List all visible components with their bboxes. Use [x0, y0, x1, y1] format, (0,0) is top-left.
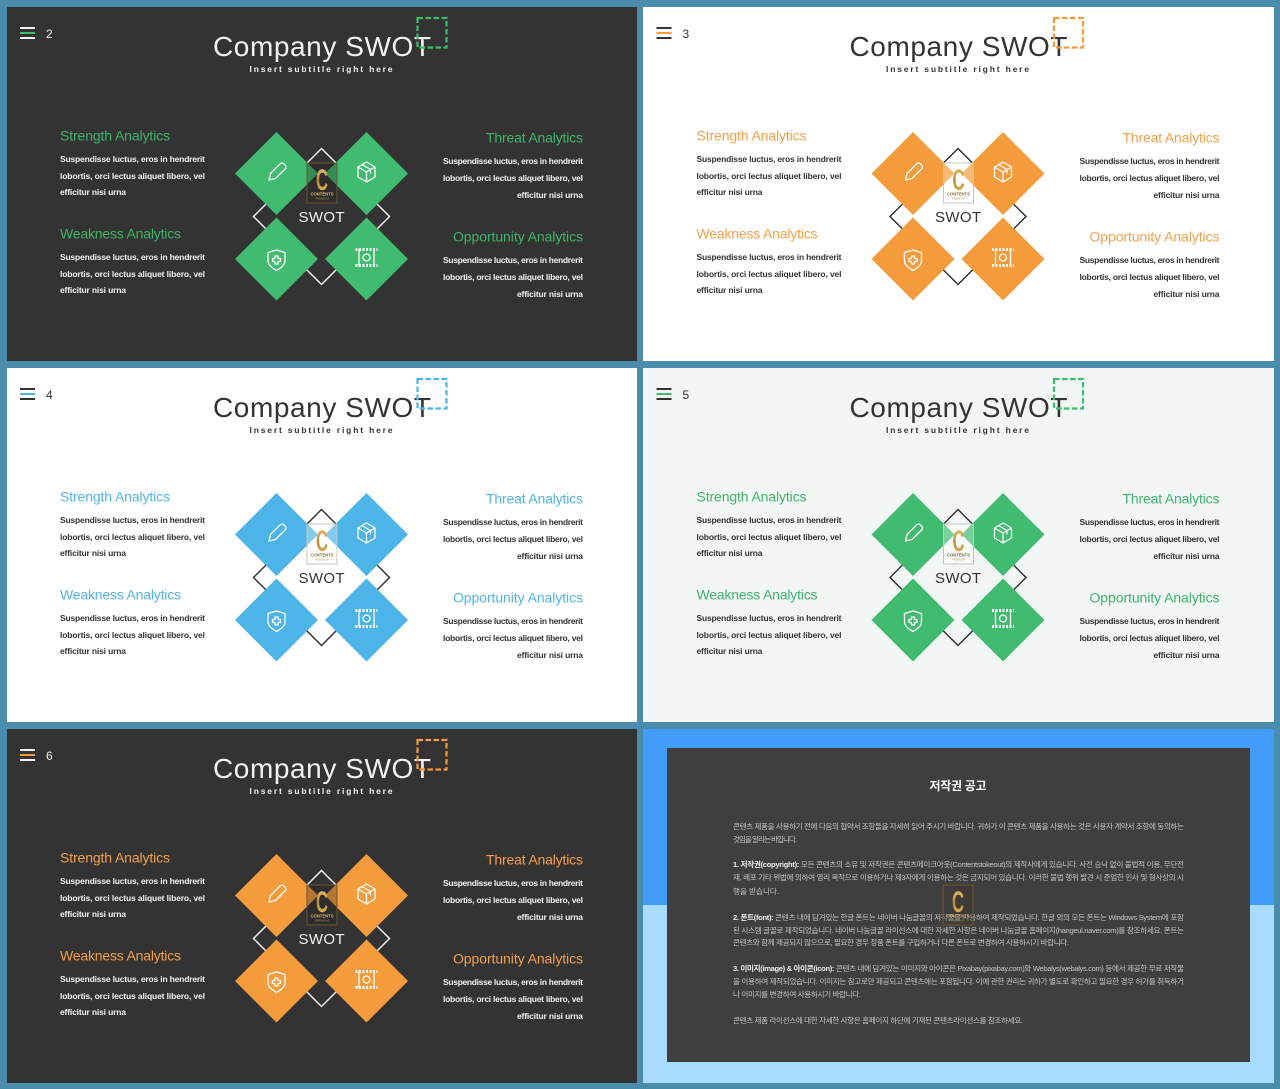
- icon: shield: [268, 250, 285, 270]
- weakness text block: lobortis, orci lectus aliquet libero, vel: [60, 991, 205, 1001]
- copyright paragraph: 재, 배포 기타 위법에 의하여 영리 목적으로 이용하거나 제3자에게 이용하는 것은 금지되어 있습니다. 이러한 불법 행위 발견 시 준엄한 민사 및 형사상의 시: [733, 872, 1184, 882]
- panel: slide 5 pale green: [643, 368, 1274, 722]
- icon: shield: [268, 611, 285, 632]
- logo: CONTENTS: [946, 914, 970, 918]
- strength text block: Strength Analytics: [60, 850, 170, 866]
- logo: PREMIUM: [952, 196, 966, 200]
- strength text block: Strength Analytics: [696, 488, 806, 504]
- page number: 6: [46, 749, 53, 763]
- opportunity text block: efficitur nisi urna: [1154, 289, 1220, 299]
- opportunity text block: efficitur nisi urna: [517, 289, 583, 299]
- diamond: opportunity: [962, 218, 1044, 300]
- image and icon paragraph: 3. 이미지(image) & 아이콘(icon): 콘텐츠 내에 담겨있는 이미지와 아이콘은 Pixabay(pixabay.com)와 Webalys(webalys.com) 등에서 제공한 무료 저작물: [733, 963, 1184, 973]
- threat text block: lobortis, orci lectus aliquet libero, vel: [1080, 173, 1220, 183]
- diamond: strength: [235, 493, 318, 576]
- swot label: SWOT: [935, 570, 981, 587]
- title dashed accent box: [1054, 379, 1083, 408]
- threat text block: [1080, 490, 1220, 561]
- opportunity text block: Suspendisse luctus, eros in hendrerit: [1080, 616, 1220, 626]
- swot diagram: [235, 493, 408, 662]
- swot label: SWOT: [298, 570, 344, 587]
- title: Company SWOT: [213, 753, 431, 784]
- logo: CONTENTS: [310, 552, 334, 558]
- strength text block: efficitur nisi urna: [60, 548, 126, 558]
- font paragraph: 콘텐츠와 함께 제공되지 않으므로, 필요한 경우 정품 폰트를 구입하거나 다른 폰트로 변경하여 사용하시기 바랍니다.: [733, 937, 1069, 947]
- opportunity text block: Suspendisse luctus, eros in hendrerit: [443, 616, 583, 626]
- strength text block: efficitur nisi urna: [696, 548, 763, 558]
- title dashed accent box: [418, 18, 446, 48]
- image and icon paragraph: 나 이미지를 변경하여 사용하시기 바랍니다.: [733, 989, 861, 999]
- icon: film: [356, 972, 378, 988]
- weakness text block: Suspendisse luctus, eros in hendrerit: [696, 252, 842, 262]
- logo: CONTENTS: [947, 552, 970, 558]
- logo: PREMIUM: [315, 918, 329, 922]
- title: Company SWOT: [850, 31, 1068, 62]
- logo: C: [316, 886, 328, 919]
- weakness text block: Weakness Analytics: [696, 226, 818, 242]
- threat text block: efficitur nisi urna: [1154, 551, 1220, 561]
- threat text block: [443, 490, 583, 561]
- weakness text block: lobortis, orci lectus aliquet libero, vel: [696, 630, 842, 640]
- menu icon: [20, 389, 35, 399]
- diamond: weakness: [235, 578, 318, 662]
- logo: CONTENTS: [310, 914, 334, 918]
- subtitle: Insert subtitle right here: [250, 64, 393, 74]
- logo: C: [952, 164, 964, 197]
- logo: [307, 885, 337, 925]
- intro paragraph: [733, 821, 1184, 844]
- swot label: SWOT: [298, 209, 344, 226]
- threat text block: lobortis, orci lectus aliquet libero, vel: [443, 173, 583, 183]
- strength text block: lobortis, orci lectus aliquet libero, vel: [696, 532, 842, 542]
- icon: box: [358, 884, 375, 904]
- font paragraph: 2. 폰트(font): 콘텐츠 내에 담겨있는 한글 폰트는 네이버 나눔글꼴의 저작물을 사용하여 제작되었습니다. 한글 외의 모든 폰트는 Windows System에 포함: [733, 912, 1184, 922]
- strength text block: lobortis, orci lectus aliquet libero, vel: [60, 171, 205, 181]
- logo: C: [316, 525, 328, 558]
- diamond: threat: [962, 493, 1044, 576]
- threat text block: efficitur nisi urna: [517, 912, 583, 922]
- weakness text block: lobortis, orci lectus aliquet libero, vel: [696, 269, 842, 279]
- image and icon paragraph: [733, 963, 1184, 999]
- opportunity text block: lobortis, orci lectus aliquet libero, vel: [443, 633, 583, 643]
- notice heading: 저작권 공고: [930, 778, 986, 793]
- menu icon: [20, 750, 35, 760]
- opportunity text block: efficitur nisi urna: [517, 650, 583, 660]
- icon: box: [358, 523, 375, 543]
- panel: slide 6 dark orange: [7, 729, 637, 1083]
- threat text block: Suspendisse luctus, eros in hendrerit: [1080, 156, 1220, 166]
- panel: slide 4 white blue: [7, 368, 637, 722]
- opportunity text block: lobortis, orci lectus aliquet libero, vel: [443, 994, 583, 1004]
- opportunity text block: Opportunity Analytics: [453, 228, 583, 244]
- diamond: strength: [235, 854, 318, 937]
- diamond: strength: [872, 132, 954, 215]
- threat text block: [443, 130, 583, 200]
- icon: film: [356, 250, 378, 266]
- subtitle: Insert subtitle right here: [886, 64, 1029, 74]
- swot diagram: [872, 493, 1044, 662]
- threat text block: [443, 852, 583, 922]
- opportunity text block: Opportunity Analytics: [453, 590, 583, 606]
- diamond: opportunity: [325, 218, 408, 300]
- page number: 4: [46, 388, 53, 402]
- diamond: weakness: [872, 578, 954, 662]
- title dashed accent box: [418, 740, 446, 770]
- weakness text block: lobortis, orci lectus aliquet libero, vel: [60, 269, 205, 279]
- logo: [943, 885, 973, 925]
- threat text block: Suspendisse luctus, eros in hendrerit: [1080, 517, 1220, 527]
- threat text block: efficitur nisi urna: [517, 551, 583, 561]
- diamond: strength: [872, 493, 954, 576]
- font paragraph: 된 시스템 글꼴로 제작되었습니다. 네이버 나눔글꼴 라이선스에 대한 자세한 사항은 네이버 나눔글꼴 홈페이지(hangeul.naver.com)를 참조하세요. 폰트는: [733, 925, 1184, 935]
- weakness text block: [696, 586, 842, 656]
- logo: [307, 524, 337, 564]
- diamond: weakness: [872, 218, 954, 300]
- opportunity text block: lobortis, orci lectus aliquet libero, vel: [1080, 272, 1220, 282]
- strength text block: lobortis, orci lectus aliquet libero, vel: [60, 532, 205, 542]
- menu icon: [656, 28, 672, 38]
- weakness text block: Weakness Analytics: [60, 948, 181, 964]
- icon: shield: [904, 611, 922, 632]
- icon: film: [356, 610, 378, 626]
- notice card: [667, 748, 1250, 1062]
- icon: box: [994, 523, 1012, 543]
- subtitle: Insert subtitle right here: [250, 786, 393, 796]
- threat text block: Suspendisse luctus, eros in hendrerit: [443, 878, 583, 888]
- icon: box: [358, 162, 375, 182]
- strength text block: Suspendisse luctus, eros in hendrerit: [60, 154, 205, 164]
- diamond: threat: [325, 132, 408, 215]
- intro paragraph: 콘텐츠 제품을 사용하기 전에 다음의 협약서 조항들을 자세히 읽어 주시기 바랍니다. 귀하가 이 콘텐츠 제품을 사용하는 것은 사용자 계약서 조항에 동의하는: [733, 821, 1184, 831]
- opportunity text block: Opportunity Analytics: [453, 950, 583, 966]
- strength text block: Suspendisse luctus, eros in hendrerit: [60, 515, 205, 525]
- page number: 5: [682, 388, 690, 402]
- diamond: threat: [325, 493, 408, 576]
- opportunity text block: [443, 590, 583, 660]
- opportunity text block: Suspendisse luctus, eros in hendrerit: [1080, 255, 1220, 265]
- license note: 콘텐츠 제품 라이선스에 대한 자세한 사항은 홈페이지 하단에 기재된 콘텐츠라이선스를 참조하세요.: [733, 1015, 1023, 1025]
- strength text block: Strength Analytics: [60, 488, 170, 504]
- swot diagram: [872, 132, 1044, 300]
- logo: PREMIUM: [951, 918, 965, 922]
- strength text block: Suspendisse luctus, eros in hendrerit: [696, 515, 842, 525]
- logo: PREMIUM: [315, 196, 329, 200]
- logo: PREMIUM: [315, 558, 329, 562]
- weakness text block: efficitur nisi urna: [60, 1007, 126, 1017]
- opportunity text block: Suspendisse luctus, eros in hendrerit: [443, 255, 583, 265]
- weakness text block: [60, 586, 205, 656]
- weakness text block: efficitur nisi urna: [60, 646, 126, 656]
- copyright paragraph: [733, 859, 1184, 896]
- weakness text block: Suspendisse luctus, eros in hendrerit: [696, 613, 842, 623]
- swot label: SWOT: [935, 209, 981, 226]
- copyright paragraph: 행을 받습니다.: [733, 886, 779, 896]
- threat text block: lobortis, orci lectus aliquet libero, vel: [1080, 534, 1220, 544]
- icon: film: [992, 250, 1014, 266]
- opportunity text block: [443, 228, 583, 299]
- icon: box: [994, 162, 1012, 182]
- weakness text block: [60, 948, 205, 1017]
- panel: copyright notice slide: [643, 729, 1274, 1083]
- threat text block: Threat Analytics: [1122, 490, 1220, 506]
- threat text block: efficitur nisi urna: [517, 190, 583, 200]
- strength text block: Suspendisse luctus, eros in hendrerit: [60, 876, 205, 886]
- icon: shield: [268, 972, 285, 992]
- diamond: weakness: [235, 218, 318, 300]
- title dashed accent box: [418, 379, 446, 408]
- icon: pencil: [269, 885, 286, 902]
- icon: pencil: [269, 524, 286, 541]
- panel: slide 2 dark green: [7, 7, 637, 361]
- weakness text block: Weakness Analytics: [60, 226, 181, 242]
- logo: CONTENTS: [310, 192, 334, 196]
- strength text block: efficitur nisi urna: [60, 909, 126, 919]
- weakness text block: efficitur nisi urna: [60, 285, 126, 295]
- icon: shield: [904, 250, 922, 270]
- logo: [944, 163, 974, 203]
- weakness text block: [696, 226, 842, 295]
- menu icon: [656, 389, 672, 399]
- opportunity text block: efficitur nisi urna: [1154, 650, 1220, 660]
- strength text block: Strength Analytics: [60, 128, 170, 144]
- opportunity text block: [443, 950, 583, 1021]
- icon: pencil: [906, 163, 922, 180]
- diamond: threat: [962, 132, 1044, 215]
- title: Company SWOT: [850, 392, 1068, 423]
- diamond: strength: [235, 132, 318, 215]
- icon: pencil: [269, 163, 286, 180]
- strength text block: [60, 850, 205, 919]
- menu icon: [20, 28, 35, 38]
- strength text block: efficitur nisi urna: [60, 187, 126, 197]
- strength text block: Strength Analytics: [696, 128, 806, 144]
- weakness text block: Weakness Analytics: [60, 586, 181, 602]
- threat text block: efficitur nisi urna: [1154, 190, 1220, 200]
- weakness text block: Weakness Analytics: [696, 586, 818, 602]
- threat text block: [1080, 130, 1220, 200]
- strength text block: [60, 128, 205, 197]
- copyright paragraph: 1. 저작권(copyright): 모든 콘텐츠의 소유 및 저작권은 콘텐츠메이크아웃(Contentstokeout)의 제작사에게 있습니다. 사전 승낙 없이 불법적 이용, 무단전: [733, 859, 1184, 869]
- strength text block: [696, 128, 842, 197]
- logo: C: [952, 525, 964, 558]
- icon: film: [992, 610, 1014, 626]
- page number: 2: [46, 27, 53, 41]
- strength text block: Suspendisse luctus, eros in hendrerit: [696, 154, 842, 164]
- subtitle: Insert subtitle right here: [886, 425, 1029, 435]
- threat text block: Threat Analytics: [486, 490, 583, 506]
- image and icon paragraph: 을 이용하여 제작되었습니다. 이미지는 참고로만 제공되고 콘텐츠에는 포함됩니다. 이에 관한 권리는 귀하가 별도로 확인하고 필요한 경우 허가를 취득하거: [733, 976, 1184, 986]
- swot label: SWOT: [298, 931, 344, 948]
- panel: slide 3 white orange: [643, 7, 1274, 361]
- weakness text block: [60, 226, 205, 295]
- opportunity text block: Opportunity Analytics: [1090, 228, 1220, 244]
- opportunity text block: Opportunity Analytics: [1090, 590, 1220, 606]
- threat text block: Threat Analytics: [486, 130, 583, 146]
- page number: 3: [682, 27, 690, 41]
- strength text block: [696, 488, 842, 558]
- logo: C: [952, 886, 964, 919]
- font paragraph: [733, 912, 1184, 947]
- logo: [307, 163, 337, 203]
- strength text block: lobortis, orci lectus aliquet libero, vel: [696, 171, 842, 181]
- strength text block: [60, 488, 205, 558]
- diamond: threat: [325, 854, 408, 937]
- threat text block: Suspendisse luctus, eros in hendrerit: [443, 156, 583, 166]
- diamond: opportunity: [325, 940, 408, 1022]
- diamond: opportunity: [325, 578, 408, 662]
- threat text block: Threat Analytics: [486, 852, 583, 868]
- opportunity text block: lobortis, orci lectus aliquet libero, vel: [1080, 633, 1220, 643]
- threat text block: Suspendisse luctus, eros in hendrerit: [443, 517, 583, 527]
- weakness text block: lobortis, orci lectus aliquet libero, vel: [60, 630, 205, 640]
- logo: C: [316, 164, 328, 197]
- logo: PREMIUM: [952, 558, 966, 562]
- threat text block: lobortis, orci lectus aliquet libero, vel: [443, 895, 583, 905]
- opportunity text block: [1080, 228, 1220, 299]
- diamond: weakness: [235, 940, 318, 1022]
- title: Company SWOT: [213, 392, 431, 423]
- weakness text block: Suspendisse luctus, eros in hendrerit: [60, 252, 205, 262]
- swot diagram: [235, 854, 408, 1022]
- threat text block: Threat Analytics: [1122, 130, 1220, 146]
- strength text block: efficitur nisi urna: [696, 187, 763, 197]
- icon: pencil: [906, 524, 922, 541]
- diamond: opportunity: [962, 578, 1044, 662]
- subtitle: Insert subtitle right here: [250, 425, 393, 435]
- title: Company SWOT: [213, 31, 431, 62]
- logo: CONTENTS: [947, 192, 970, 196]
- intro paragraph: 것임을 알리는 바입니다.: [733, 834, 797, 844]
- weakness text block: efficitur nisi urna: [696, 285, 763, 295]
- weakness text block: Suspendisse luctus, eros in hendrerit: [60, 613, 205, 623]
- opportunity text block: efficitur nisi urna: [517, 1011, 583, 1021]
- weakness text block: efficitur nisi urna: [696, 646, 763, 656]
- title dashed accent box: [1054, 18, 1083, 48]
- swot diagram: [235, 132, 408, 300]
- logo: [944, 524, 974, 564]
- threat text block: lobortis, orci lectus aliquet libero, vel: [443, 534, 583, 544]
- strength text block: lobortis, orci lectus aliquet libero, vel: [60, 893, 205, 903]
- weakness text block: Suspendisse luctus, eros in hendrerit: [60, 974, 205, 984]
- opportunity text block: Suspendisse luctus, eros in hendrerit: [443, 977, 583, 987]
- opportunity text block: [1080, 590, 1220, 660]
- opportunity text block: lobortis, orci lectus aliquet libero, vel: [443, 272, 583, 282]
